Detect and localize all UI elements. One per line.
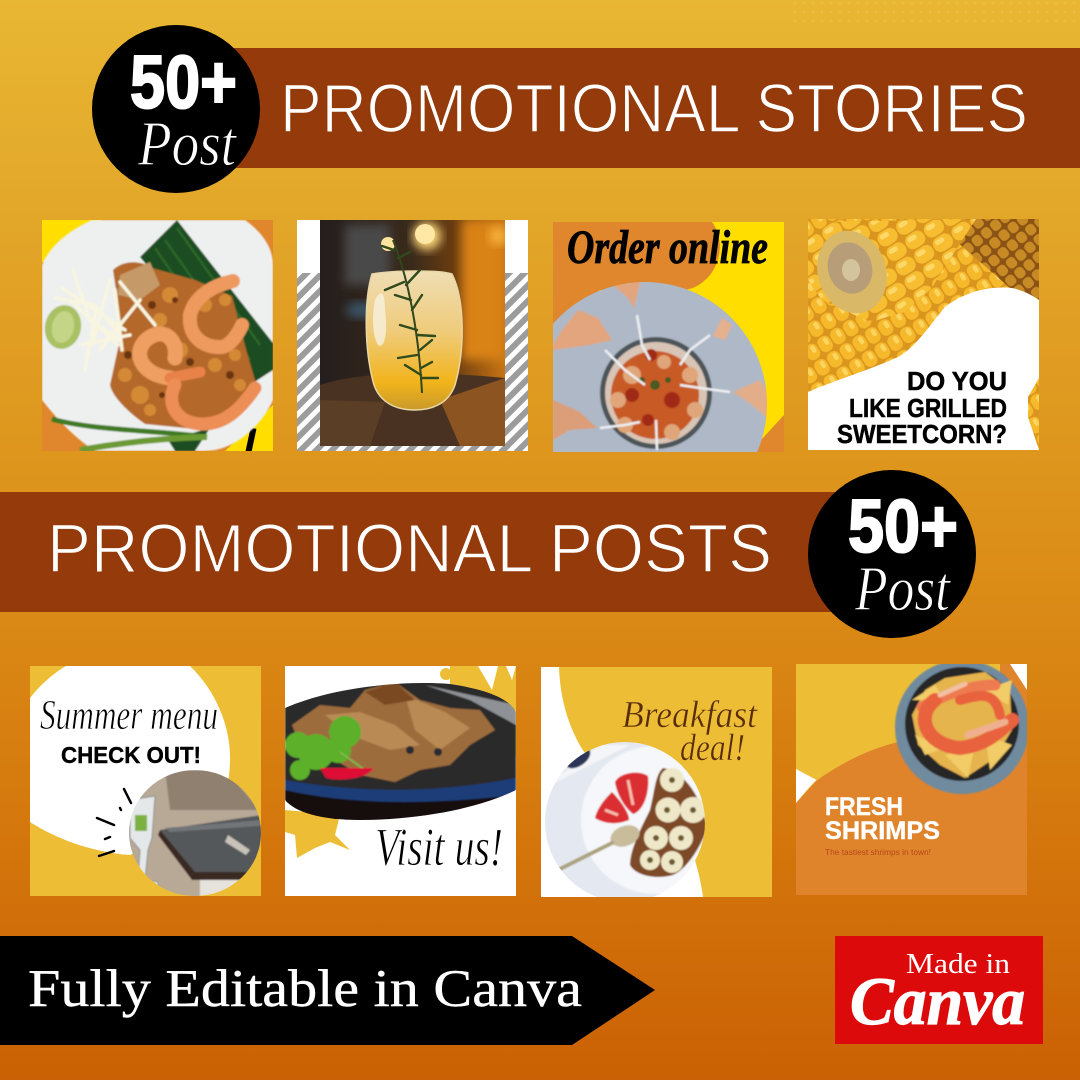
card: grilled sweetcorn bbox=[807, 219, 1039, 450]
badge: 50+ post: Post bbox=[854, 553, 952, 624]
label: visit us: Visit us! bbox=[375, 817, 503, 877]
card: pad thai dish bbox=[41, 220, 273, 454]
card: visit us bbox=[285, 666, 516, 896]
label: breakfast deal: deal! bbox=[680, 727, 745, 769]
question text bbox=[837, 372, 1006, 444]
badge: 50+ post bbox=[808, 470, 976, 638]
drink photo bbox=[320, 220, 507, 446]
white wave shape bbox=[808, 287, 1039, 450]
banner: promotional posts bbox=[0, 470, 976, 638]
label: order online: Order online bbox=[567, 221, 768, 274]
badge: 50+ post: Post bbox=[137, 108, 238, 179]
heading: promotional posts: PROMOTIONAL POSTS bbox=[47, 510, 772, 587]
label: breakfast deal: Breakfast bbox=[622, 694, 758, 736]
editable text: Fully Editable in Canva bbox=[28, 960, 582, 1018]
arrow banner: fully editable in canva bbox=[0, 936, 655, 1045]
badge: made in canva: Made in bbox=[906, 949, 1010, 980]
badge: 50+ post: 50+ bbox=[848, 484, 958, 568]
meat dish photo bbox=[285, 680, 516, 825]
heading: fresh shrimps: FRESH bbox=[825, 793, 903, 821]
card: cocktail drink bbox=[297, 220, 528, 451]
question text: SWEETCORN? bbox=[837, 419, 1007, 449]
badge: made in canva bbox=[835, 936, 1043, 1044]
card: breakfast deal bbox=[541, 667, 772, 900]
question text: LIKE GRILLED bbox=[849, 393, 1007, 423]
pasta bowl photo bbox=[895, 660, 1029, 794]
label: breakfast deal bbox=[622, 700, 758, 760]
burst lines bbox=[97, 789, 131, 856]
heading: fresh shrimps: SHRIMPS bbox=[825, 817, 940, 845]
heading: fresh shrimps bbox=[826, 797, 940, 840]
badge: 50+ post: 50+ bbox=[130, 40, 237, 124]
badge: made in canva: Canva bbox=[850, 963, 1025, 1039]
question text: DO YOU bbox=[907, 366, 1007, 396]
plate photo bbox=[553, 282, 767, 452]
badge: 50+ post bbox=[92, 25, 260, 193]
plate and food photo bbox=[41, 220, 273, 451]
toast photo bbox=[545, 742, 705, 897]
card: summer menu bbox=[30, 666, 265, 900]
card: order online bbox=[553, 222, 784, 452]
restaurant photo bbox=[125, 770, 265, 900]
banner: promotional stories bbox=[92, 25, 1080, 193]
label: summer menu: Summer menu bbox=[40, 693, 218, 739]
card: fresh shrimps bbox=[796, 660, 1029, 895]
label: check out: CHECK OUT! bbox=[61, 742, 201, 768]
tagline: The tastiest shrimps in town! bbox=[825, 847, 931, 857]
